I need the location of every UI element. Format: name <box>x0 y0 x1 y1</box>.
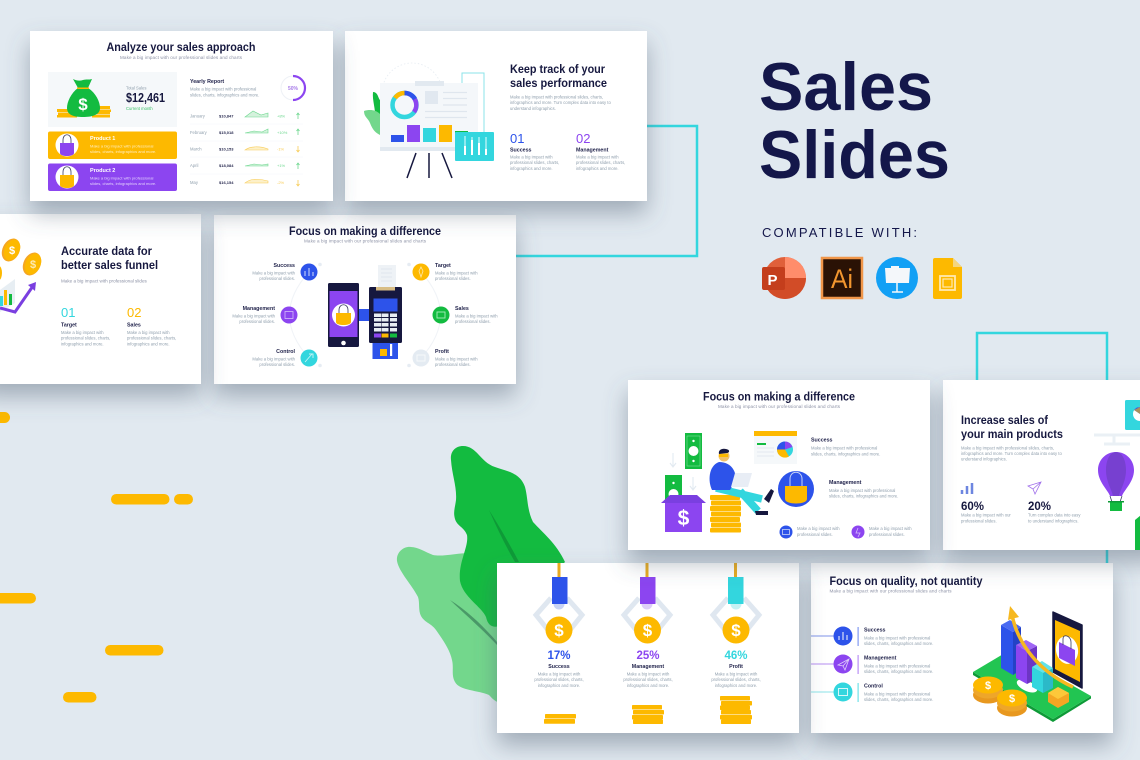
total sales card <box>48 72 177 127</box>
50% donut <box>281 76 305 100</box>
total sales card: Current month <box>126 106 153 111</box>
dashboard card <box>754 431 797 464</box>
monthly table: March <box>190 146 202 152</box>
panel: keep track of your sales performance: sales performance <box>510 76 607 90</box>
labels right: Make a big impact with <box>435 356 478 362</box>
labels left: Control <box>276 349 296 355</box>
claw column: profit: Make a big impact with <box>715 672 758 676</box>
total sales card: $12,461 <box>126 90 165 105</box>
text management: Management <box>829 480 862 486</box>
panel: accurate data for better sales funnel: better sales funnel <box>61 258 158 272</box>
monthly table: -1% <box>277 146 285 152</box>
icon: Illustrator <box>822 258 862 298</box>
claw column: management <box>623 563 673 688</box>
icon: Google Slides <box>933 258 962 299</box>
item 01 <box>61 305 110 346</box>
isometric illustration <box>973 606 1091 722</box>
item 01: Success <box>510 148 532 154</box>
title: Sales <box>759 49 933 125</box>
description: infographics and more. Turn complex data into easy to <box>961 451 1062 456</box>
subheading: Make a big impact with our professional slides and charts <box>120 55 243 60</box>
text management <box>829 480 898 498</box>
claw column: profit: infographics and more. <box>715 683 757 688</box>
labels left: Management <box>243 306 275 312</box>
list rows: slides, charts, infographics and more. <box>864 697 933 702</box>
monthly table: April <box>190 163 198 168</box>
monthly table <box>190 111 303 186</box>
panel: three percentage claws <box>497 563 799 733</box>
stat 60%: professional slides. <box>961 518 997 524</box>
monthly table: May <box>190 180 199 185</box>
description: Make a big impact with professional slides, charts, <box>961 446 1054 450</box>
claw column: success <box>534 563 584 688</box>
stat 60%: Make a big impact with our <box>961 512 1011 518</box>
stat 60%: 60% <box>961 501 984 513</box>
stat 20%: Turn complex data into easy <box>1028 512 1081 518</box>
text success: Make a big impact with professional <box>811 446 877 450</box>
balloon illustration <box>1094 400 1140 550</box>
claw column: success: professional slides, charts, <box>534 677 584 682</box>
panel: analyze your sales approach <box>30 31 333 201</box>
labels right: professional slides. <box>435 276 471 281</box>
leaves illustration <box>397 446 565 703</box>
title <box>759 49 950 193</box>
labels left: professional slides. <box>259 276 295 281</box>
panel: focus on making a difference (payment) <box>214 215 516 384</box>
monthly table: $10,847 <box>219 114 234 118</box>
claw column: management: professional slides, charts, <box>623 677 673 682</box>
text management: Make a big impact with professional <box>829 488 895 493</box>
item 02: infographics and more. <box>127 342 170 346</box>
isometric illustration: $ <box>1009 693 1015 705</box>
description: Make a big impact with professional slides <box>61 278 147 284</box>
list rows <box>811 626 933 702</box>
item 01: Target <box>61 322 77 328</box>
product 1 bar: Make a big impact with professional <box>90 144 153 148</box>
item 01: professional slides, charts, <box>510 160 559 165</box>
labels right: Make a big impact with <box>435 270 478 276</box>
monthly table: January <box>190 114 206 118</box>
stat 20% <box>1028 482 1081 524</box>
subheading: Make a big impact with our professional slides and charts <box>830 588 952 594</box>
product 2 bar <box>48 164 177 191</box>
list rows: slides, charts, infographics and more. <box>864 669 933 674</box>
labels left: Make a big impact with <box>232 314 276 318</box>
claw column: profit: Profit <box>729 664 743 670</box>
item 01: Make a big impact with <box>61 330 104 335</box>
icon: PowerPoint: P <box>768 272 778 289</box>
claw column: success: 17% <box>547 650 571 662</box>
item 02: Sales <box>127 322 141 328</box>
monthly table: +10% <box>277 130 288 135</box>
item 01: 01 <box>61 305 75 320</box>
monthly table: -2% <box>277 180 285 185</box>
heading: Keep track of your <box>510 62 605 76</box>
text success <box>811 438 880 456</box>
heading: Focus on quality, not quantity <box>830 574 983 588</box>
item 01 <box>510 131 559 171</box>
item 02: professional slides, charts, <box>576 160 625 165</box>
total sales card: $ <box>78 95 88 114</box>
item 01: 01 <box>510 131 524 146</box>
item 02: infographics and more. <box>576 166 619 171</box>
subheading: Make a big impact with our professional slides and charts <box>718 404 841 409</box>
claw column: profit <box>711 563 761 688</box>
bag circle <box>778 471 814 507</box>
panel: accurate data for better sales funnel <box>0 214 201 384</box>
claw column: profit: 46% <box>724 650 748 662</box>
cyan outline frame (lower) <box>977 333 1107 580</box>
description: understand infographics. <box>510 106 556 111</box>
item 02: 02 <box>127 305 141 320</box>
product 2 bar: slides, charts, infographics and more. <box>90 181 156 186</box>
product 1 bar <box>48 132 177 159</box>
phone and card terminal illustration <box>328 265 402 359</box>
person and money illustration <box>661 433 774 532</box>
item 02: Management <box>576 148 609 154</box>
subheading: Make a big impact with our professional slides and charts <box>304 238 427 244</box>
bottom icons with text: Make a big impact with <box>869 526 912 531</box>
labels right: Profit <box>435 349 449 355</box>
coins and arrow illustration <box>0 236 45 312</box>
50% donut: 50% <box>288 86 299 92</box>
bottom icons with text: professional slides. <box>869 532 905 537</box>
item 01: professional slides, charts, <box>61 336 110 340</box>
claw column: management: infographics and more. <box>627 683 669 688</box>
yearly report text: Yearly Report <box>190 79 224 85</box>
compatible with heading: COMPATIBLE WITH: <box>762 225 917 240</box>
claw column: success: Success <box>548 664 570 670</box>
labels left: professional slides. <box>259 362 295 367</box>
list rows: Control <box>864 684 883 690</box>
claw column: success: infographics and more. <box>538 683 580 688</box>
monthly table: February <box>190 130 208 135</box>
heading: Focus on making a difference <box>289 224 441 238</box>
claw column: success: $ <box>554 621 564 640</box>
total sales card: Total Sales <box>126 86 146 90</box>
labels right: professional slides. <box>435 362 471 367</box>
labels right: Target <box>435 263 451 269</box>
list rows: Make a big impact with professional <box>864 636 930 640</box>
yearly report text: slides, charts, infographics and more. <box>190 92 259 98</box>
bottom icons with text: professional slides. <box>797 532 833 537</box>
monthly table: +8% <box>277 114 286 118</box>
labels left: professional slides. <box>239 319 275 324</box>
list rows: Make a big impact with professional <box>864 664 930 668</box>
stat 20%: to understand infographics. <box>1028 518 1079 524</box>
list rows: Success <box>864 628 886 634</box>
text success: Success <box>811 438 833 444</box>
coins and arrow illustration: $ <box>9 245 15 257</box>
claw column: management: $ <box>643 621 653 640</box>
item 01: infographics and more. <box>61 342 104 346</box>
list rows: Make a big impact with professional <box>864 692 930 696</box>
bottom icons with text: Make a big impact with <box>797 526 840 531</box>
item 01: infographics and more. <box>510 166 553 171</box>
labels left: Success <box>274 263 295 269</box>
yearly report text: Make a big impact with professional <box>190 86 256 92</box>
cyan outline frame (upper) <box>510 126 697 256</box>
description: infographics and more. Turn complex data into easy to <box>510 100 611 105</box>
labels left: Make a big impact with <box>252 270 296 276</box>
labels left <box>232 263 296 367</box>
claw column: success: Make a big impact with <box>538 672 581 676</box>
item 02: professional slides, charts, <box>127 336 176 340</box>
stat 20%: 20% <box>1028 501 1051 513</box>
panel: increase sales of your main products <box>943 380 1140 550</box>
labels right <box>435 263 498 367</box>
product 2 bar: Product 2 <box>90 168 115 174</box>
claw column: profit: professional slides, charts, <box>711 677 761 682</box>
heading: Increase sales of <box>961 413 1049 427</box>
panel: increase sales of your main products: your main products <box>961 427 1063 441</box>
title: Slides <box>759 117 950 193</box>
decorative yellow dashes <box>0 412 193 702</box>
panel: keep track of your sales performance <box>345 31 647 201</box>
heading: Analyze your sales approach <box>106 40 256 54</box>
panel: focus on making a difference (person) <box>628 380 930 550</box>
description: understand infographics. <box>961 456 1007 462</box>
coin stacks <box>544 696 752 724</box>
item 02: 02 <box>576 131 590 146</box>
heading: Accurate data for <box>61 244 152 258</box>
stat 60% <box>961 483 1011 524</box>
isometric illustration: $ <box>985 680 991 692</box>
description <box>510 94 611 111</box>
claw column: management: Make a big impact with <box>627 672 670 676</box>
icon: Keynote <box>876 257 918 299</box>
claw column: profit: $ <box>731 621 741 640</box>
list rows: slides, charts, infographics and more. <box>864 641 933 646</box>
description: Make a big impact with professional slides, charts, <box>510 94 603 100</box>
product 2 bar: Make a big impact with professional <box>90 176 153 180</box>
description <box>961 446 1062 462</box>
presentation board illustration <box>364 63 494 178</box>
claw column: management: 25% <box>636 650 660 662</box>
text success: slides, charts, infographics and more. <box>811 452 880 456</box>
list rows: Management <box>864 656 897 662</box>
product 1 bar: slides, charts, infographics and more. <box>90 149 156 154</box>
monthly table: +1% <box>277 163 286 168</box>
item 02: Make a big impact with <box>576 154 619 160</box>
labels right: Sales <box>455 306 469 312</box>
item 02: Make a big impact with <box>127 330 170 335</box>
bottom icons with text <box>780 526 912 538</box>
text management: slides, charts, infographics and more. <box>829 494 898 498</box>
icon: PowerPoint <box>762 257 806 299</box>
labels right: Make a big impact with <box>455 314 498 318</box>
yearly report text <box>190 79 259 98</box>
heading: Focus on making a difference <box>703 390 855 404</box>
monthly table: $15,018 <box>219 130 234 135</box>
panel: focus on quality, not quantity <box>811 563 1113 733</box>
product 1 bar: Product 1 <box>90 136 115 142</box>
labels right: professional slides. <box>455 319 491 324</box>
labels left: Make a big impact with <box>252 356 296 362</box>
icon: Illustrator: Ai <box>831 264 853 294</box>
coins and arrow illustration: $ <box>30 259 36 271</box>
monthly table: $16,154 <box>219 180 234 185</box>
item 02 <box>127 305 176 346</box>
person and money illustration: $ <box>678 507 690 530</box>
item 01: Make a big impact with <box>510 154 553 160</box>
claw column: management: Management <box>632 664 664 670</box>
side arcs with feature circles <box>280 263 450 367</box>
monthly table: $18,084 <box>219 163 234 168</box>
item 02 <box>576 131 625 171</box>
monthly table: $10,153 <box>219 146 234 152</box>
